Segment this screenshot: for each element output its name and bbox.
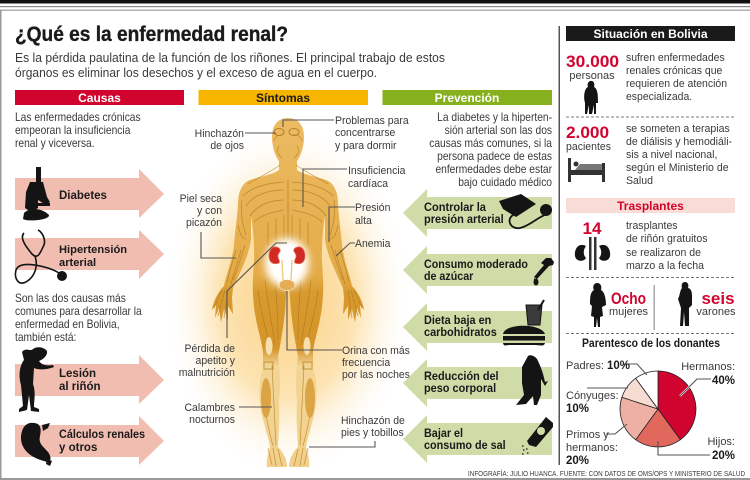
stat: 14 trasplantes: de riñón gratuitos xyxy=(626,233,707,245)
prevention arrow: sal: consumo de sal xyxy=(424,440,506,452)
symptom: orina: por las noches xyxy=(342,369,410,381)
symptom: piel seca: y con xyxy=(197,205,222,217)
stat: ocho mujeres: Ocho xyxy=(611,289,646,308)
prevention arrow: presion arterial: Controlar la xyxy=(424,202,486,214)
icon: stethoscope xyxy=(15,230,67,283)
causas text 2: también está: xyxy=(15,331,76,344)
column divider xyxy=(558,26,560,465)
icon: kidneys xyxy=(575,237,610,270)
stat: 30.000 personas: sufren enfermedades xyxy=(626,52,725,64)
symptom: hinchazon de pies: Hinchazón de xyxy=(341,415,405,427)
prevention arrow: peso: Reducción del xyxy=(424,371,499,383)
icon: person with back pain xyxy=(19,347,54,412)
pie chart: parentesco xyxy=(620,371,696,447)
label: hermanos: Hermanos: xyxy=(681,361,735,373)
stat: 14 trasplantes: marzo a la fecha xyxy=(626,260,704,272)
prevention arrow: presion arterial xyxy=(403,189,552,237)
prevention arrow: sal: Bajar el xyxy=(424,428,463,440)
stat: seis varones: varones xyxy=(696,306,736,318)
stat: seis varones xyxy=(678,282,736,326)
stat: 30.000 personas: renales crónicas que xyxy=(626,65,722,77)
prevencion text: persona padece de estas xyxy=(437,150,553,163)
stat: ocho mujeres: mujeres xyxy=(609,306,649,318)
stat: 2.000 pacientes: pacientes xyxy=(566,141,611,153)
prevention arrow: peso xyxy=(403,355,552,407)
heading: prevencion: Prevención xyxy=(435,91,499,105)
icon: woman silhouette xyxy=(590,283,606,327)
cause arrow: lesion xyxy=(15,347,164,412)
dashed divider xyxy=(566,116,735,118)
symptom: perdida de apetito: Pérdida de xyxy=(184,343,235,355)
pie labels xyxy=(566,360,735,467)
cause arrow: diabetes xyxy=(15,167,164,220)
symptom: presion: alta xyxy=(355,215,372,227)
dashed divider xyxy=(566,276,735,278)
cause arrow: calculos: y otros xyxy=(59,442,97,454)
symptom: hinchazon de ojos: Hinchazón xyxy=(195,128,244,140)
heading: trasplantes xyxy=(566,198,735,213)
stat: 2.000 pacientes: de diálisis y hemodiáli- xyxy=(626,136,732,148)
label: conyuges: Cónyuges: xyxy=(566,390,619,402)
icon: overweight person xyxy=(516,355,548,405)
icon: stomach xyxy=(21,423,52,466)
intro text: Es la pérdida paulatina de la función de los riñones. El principal trabajo de estos xyxy=(15,51,445,65)
stat: ocho mujeres xyxy=(590,283,649,327)
slice: hermanos 40% xyxy=(658,371,696,440)
cause arrow: hipertension: Hipertensión xyxy=(59,244,127,256)
symptom: hinchazon de ojos: de ojos xyxy=(210,140,244,152)
cause arrow: diabetes: Diabetes xyxy=(59,190,107,202)
icon: burger and drink xyxy=(503,300,545,346)
cause arrow: calculos xyxy=(15,416,164,466)
causas text 1: empeoran la insuficiencia xyxy=(15,124,131,137)
stat: 2.000 pacientes xyxy=(566,123,732,187)
label: hijos: Hijos: xyxy=(707,436,735,448)
title: ¿Qué es la enfermedad renal? xyxy=(15,23,288,46)
intro text xyxy=(15,51,445,80)
stat: 30.000 personas: personas xyxy=(569,70,615,82)
causas text 1: Las enfermedades crónicas xyxy=(15,111,141,124)
stat: 14 trasplantes xyxy=(575,219,707,272)
heading: parentesco: Parentesco de los donantes xyxy=(582,338,720,350)
symptom: insuficiencia: cardíaca xyxy=(348,178,388,190)
symptom: perdida de apetito: apetito y xyxy=(196,355,236,367)
symptom: calambres: nocturnos xyxy=(189,414,235,426)
cause arrow: hipertension: arterial xyxy=(59,257,96,269)
label: conyuges: 10% xyxy=(566,403,589,415)
symptom leader lines xyxy=(201,120,375,447)
prevencion text: causas más comunes, si la xyxy=(429,137,553,150)
stat: 14 trasplantes: 14 xyxy=(583,219,602,238)
icon: blood pressure cuff xyxy=(499,194,552,228)
prevention arrow: dieta xyxy=(403,300,552,351)
prevention arrow: azucar xyxy=(403,246,554,294)
stat: 30.000 personas: 30.000 xyxy=(566,52,619,71)
pie leader lines xyxy=(587,364,711,455)
label: primos: 20% xyxy=(566,455,589,467)
slice: hijos 20% xyxy=(636,409,680,447)
symptom: problemas: y para dormir xyxy=(335,140,397,152)
icon: elderly person xyxy=(584,81,598,114)
stat: seis varones: seis xyxy=(701,289,735,308)
body illustration xyxy=(163,118,413,480)
heading: sintomas: Síntomas xyxy=(256,91,310,105)
symptom: calambres: Calambres xyxy=(185,402,235,414)
label: primos: Primos y xyxy=(566,429,609,441)
cause arrow: lesion: al riñón xyxy=(59,381,101,393)
heading: sintomas xyxy=(198,90,368,105)
slice: conyuges 10% xyxy=(622,378,658,409)
causas text 2: enfermedad en Bolivia, xyxy=(15,318,120,331)
causas text 2: Son las dos causas más xyxy=(15,292,126,305)
causas text 2: comunes para desarrollar la xyxy=(15,305,143,318)
slice: padres 10% xyxy=(636,371,658,409)
symptom: presion: Presión xyxy=(355,202,390,214)
prevencion text: La diabetes y la hiperten- xyxy=(437,111,552,124)
prevencion text: sión arterial son las dos xyxy=(445,124,553,137)
stat: 2.000 pacientes: 2.000 xyxy=(566,123,609,142)
prevention arrow: peso: peso corporal xyxy=(424,383,496,395)
heading: causas: Causas xyxy=(78,91,121,105)
symptom: hinchazon de pies: pies y tobillos xyxy=(341,427,404,439)
icon: microscope xyxy=(23,167,50,220)
stat: 30.000 personas: especializada. xyxy=(626,91,692,103)
symptom: insuficiencia: Insuficiencia xyxy=(348,165,405,177)
symptom: piel seca: Piel seca xyxy=(180,193,222,205)
symptom: problemas: concentrarse xyxy=(335,127,395,139)
prevention arrow: azucar: Consumo moderado xyxy=(424,259,528,271)
symptom: problemas: Problemas para xyxy=(335,115,409,127)
dashed divider xyxy=(566,332,735,334)
heading: prevencion xyxy=(382,90,552,105)
stat: 2.000 pacientes: sis a nivel nacional, xyxy=(626,149,717,161)
stat: 2.000 pacientes: se someten a terapias xyxy=(626,123,730,135)
stat: 2.000 pacientes: según el Ministerio de xyxy=(626,162,729,174)
prevention arrow: dieta: carbohidratos xyxy=(424,327,497,339)
symptom: orina: frecuencia xyxy=(342,357,390,369)
kidneys and urinary tract xyxy=(269,247,305,290)
heading: trasplantes: Trasplantes xyxy=(617,199,684,213)
prevention arrow: dieta: Dieta baja en xyxy=(424,315,491,327)
cause arrow: hipertension xyxy=(15,230,164,283)
icon: dropper xyxy=(534,258,554,286)
icon: man silhouette xyxy=(678,282,692,326)
symptom: piel seca: picazón xyxy=(186,217,222,229)
stat: 30.000 personas xyxy=(566,52,727,114)
heading: causas xyxy=(15,90,184,105)
symptom: anemia: Anemia xyxy=(355,238,390,250)
prevencion text: enfermedades debe estar xyxy=(435,163,552,176)
intro text: órganos es eliminar los desechos y el exceso de agua en el cuerpo. xyxy=(15,66,377,80)
cause arrow: lesion: Lesión xyxy=(59,368,96,380)
prevention arrow: sal xyxy=(403,415,553,463)
label: primos: hermanos: xyxy=(566,442,618,454)
heading: situacion en bolivia: Situación en Bolivia xyxy=(593,27,708,41)
stat: 14 trasplantes: se realizaron de xyxy=(626,247,701,259)
stat: 2.000 pacientes: Salud xyxy=(626,175,653,187)
prevention arrow: azucar: de azúcar xyxy=(424,271,474,283)
symptom labels xyxy=(179,115,410,439)
symptom: orina: Orina con más xyxy=(342,345,410,357)
label: hermanos: 40% xyxy=(712,375,735,387)
symptom: perdida de apetito: malnutrición xyxy=(179,367,235,379)
icon: salt shaker xyxy=(522,417,553,454)
label: padres: Padres: 10% xyxy=(566,360,630,372)
vertical rule xyxy=(654,285,655,330)
label: hijos: 20% xyxy=(712,450,735,462)
heading: situacion en bolivia xyxy=(566,26,735,41)
prevention arrow: presion arterial: presión arterial xyxy=(424,214,504,226)
prevencion text: bajo cuidado médico xyxy=(458,176,552,189)
causas text 1: renal y viceversa. xyxy=(15,137,95,150)
stat: 30.000 personas: requieren de atención xyxy=(626,78,727,90)
stat: 14 trasplantes: trasplantes xyxy=(626,220,678,232)
icon: hospital bed xyxy=(568,158,605,182)
cause arrow: calculos: Cálculos renales xyxy=(59,429,145,441)
slice: primos 20% xyxy=(620,397,658,440)
